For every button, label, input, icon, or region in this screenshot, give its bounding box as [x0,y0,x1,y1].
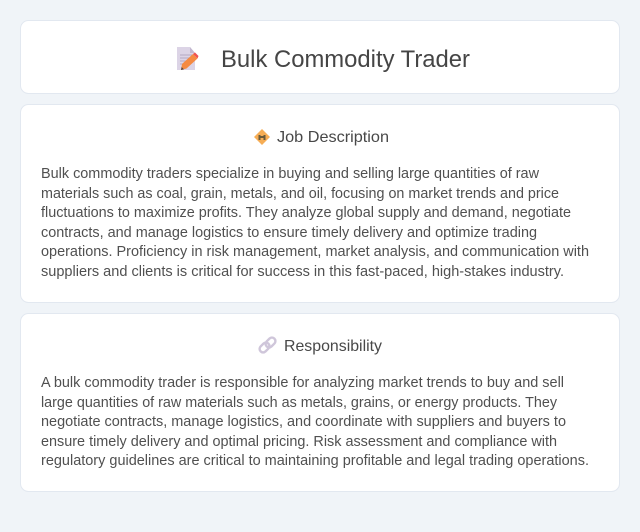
panel: title header [20,20,620,94]
text block: responsibility: regulatory guidelines are critical to maintaining profitable and legal trading operations. [41,453,589,469]
heading: responsibility: Responsibility [284,338,382,355]
panel: responsibility [20,314,620,492]
icon: orange diamond [254,129,270,145]
text block: job description [41,166,589,280]
text block: job description: materials such as coal, grain, metals, and oil, focusing on market trends and price [41,186,559,202]
heading: job description: Job Description [277,129,389,146]
text block: responsibility: large quantities of raw materials such as metals, grains, or energy products. They [41,395,558,411]
text block: job description: operations. Proficiency in risk management, market analysis, and communication with [41,244,589,260]
panel: job description [20,104,620,302]
text block: responsibility: ensure timely delivery and optimal pricing. Risk assessment and compliance with [41,434,557,450]
icon: chain link [258,336,277,354]
text block: job description: Bulk commodity traders specialize in buying and selling large quantities of raw [41,166,540,182]
text block: responsibility: A bulk commodity trader is responsible for analyzing market trends to buy and sell [41,375,564,391]
text block: job description: suppliers and clients is critical for success in this fast-paced, high-stakes industry. [41,264,564,280]
icon: document with pencil [177,47,198,70]
text block: responsibility: negotiate contracts, manage logistics, and coordinate with suppliers and buyers to [41,414,566,430]
text block: job description: fluctuations to maximize profits. They analyze global supply and demand, negotiate [41,205,571,221]
title: Bulk Commodity Trader [221,46,470,73]
text block: job description: contracts, and manage logistics to ensure timely delivery and optimize trading [41,225,537,241]
text block: responsibility [41,375,589,469]
